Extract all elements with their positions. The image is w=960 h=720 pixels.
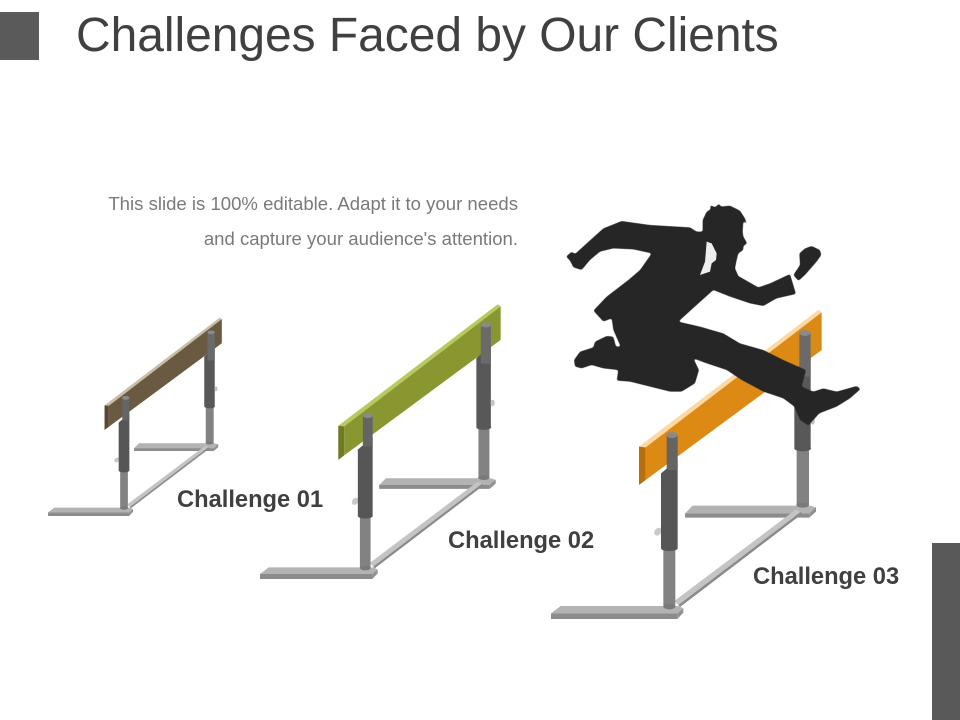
label: Challenge 02: Challenge 02 — [448, 528, 594, 554]
description text: and capture your audience's attention. — [204, 228, 518, 249]
hurdle 2 — [260, 304, 501, 579]
description text — [108, 193, 518, 249]
icon: jumping businessman silhouette — [566, 203, 861, 426]
right side bar — [932, 543, 960, 720]
hurdle 3 — [551, 310, 822, 619]
label: Challenge 03: Challenge 03 — [753, 564, 899, 590]
description text: This slide is 100% editable. Adapt it to your needs — [108, 193, 518, 214]
label: Challenge 01: Challenge 01 — [177, 487, 323, 513]
accent square — [0, 12, 39, 60]
hurdle 1 — [48, 318, 222, 516]
title: Challenges Faced by Our Clients — [76, 9, 779, 62]
